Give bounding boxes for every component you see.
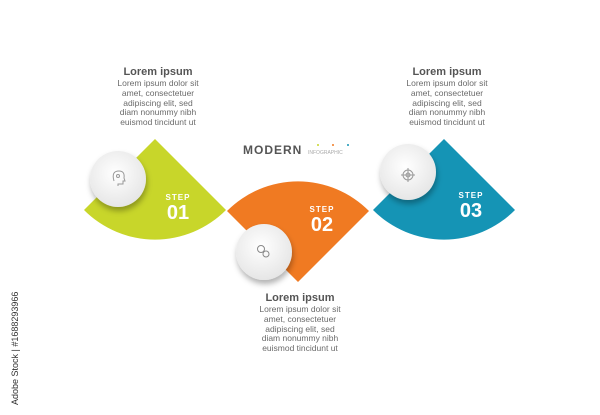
step 3 label: 03 xyxy=(460,200,482,222)
text block: step 1: Lorem ipsum dolor sit xyxy=(117,78,199,88)
wedge: step 3 xyxy=(373,139,515,240)
circle button 2 with gear icon xyxy=(236,224,292,280)
step 2 label: 02 xyxy=(311,214,333,236)
text block: step 1: diam nonummy nibh xyxy=(120,107,196,117)
text block: step 2: Lorem ipsum xyxy=(265,292,335,304)
watermark id: Adobe Stock | #1688293966 xyxy=(10,292,20,405)
text block: step 2 xyxy=(259,292,341,353)
step 1 label: 01 xyxy=(167,202,189,224)
text block: step 3: adipiscing elit, sed xyxy=(412,98,482,108)
text block: step 1: amet, consectetuer xyxy=(122,88,194,98)
heading: MODERN infographic: INFOGRAPHIC xyxy=(308,150,343,156)
heading: MODERN infographic xyxy=(243,143,349,157)
text block: step 1: Lorem ipsum xyxy=(123,66,193,78)
text block: step 3: Lorem ipsum xyxy=(412,66,482,78)
text block: step 1 xyxy=(117,66,199,127)
step 1 label xyxy=(166,193,190,224)
text block: step 3: diam nonummy nibh xyxy=(409,107,485,117)
wedge: step 2 xyxy=(227,181,369,282)
text block: step 2: amet, consectetuer xyxy=(264,314,336,324)
text block: step 3: Lorem ipsum dolor sit xyxy=(406,78,488,88)
wedge: step 1 xyxy=(84,139,226,240)
text block: step 3: euismod tincidunt ut xyxy=(409,117,485,127)
step 3 label xyxy=(459,191,483,222)
text block: step 2: diam nonummy nibh xyxy=(262,333,338,343)
text block: step 1: adipiscing elit, sed xyxy=(123,98,193,108)
step 1 label: STEP xyxy=(166,193,190,202)
text block: step 2: Lorem ipsum dolor sit xyxy=(259,304,341,314)
heading: MODERN infographic: MODERN xyxy=(243,143,302,157)
circle button 1 with head icon xyxy=(90,151,146,207)
step 2 label xyxy=(310,205,334,236)
circle button 3 with target icon xyxy=(380,144,436,200)
text block: step 2: adipiscing elit, sed xyxy=(265,324,335,334)
text block: step 3 xyxy=(406,66,488,127)
text block: step 2: euismod tincidunt ut xyxy=(262,343,338,353)
text block: step 1: euismod tincidunt ut xyxy=(120,117,196,127)
step 3 label: STEP xyxy=(459,191,483,200)
text block: step 3: amet, consectetuer xyxy=(411,88,483,98)
step 2 label: STEP xyxy=(310,205,334,214)
